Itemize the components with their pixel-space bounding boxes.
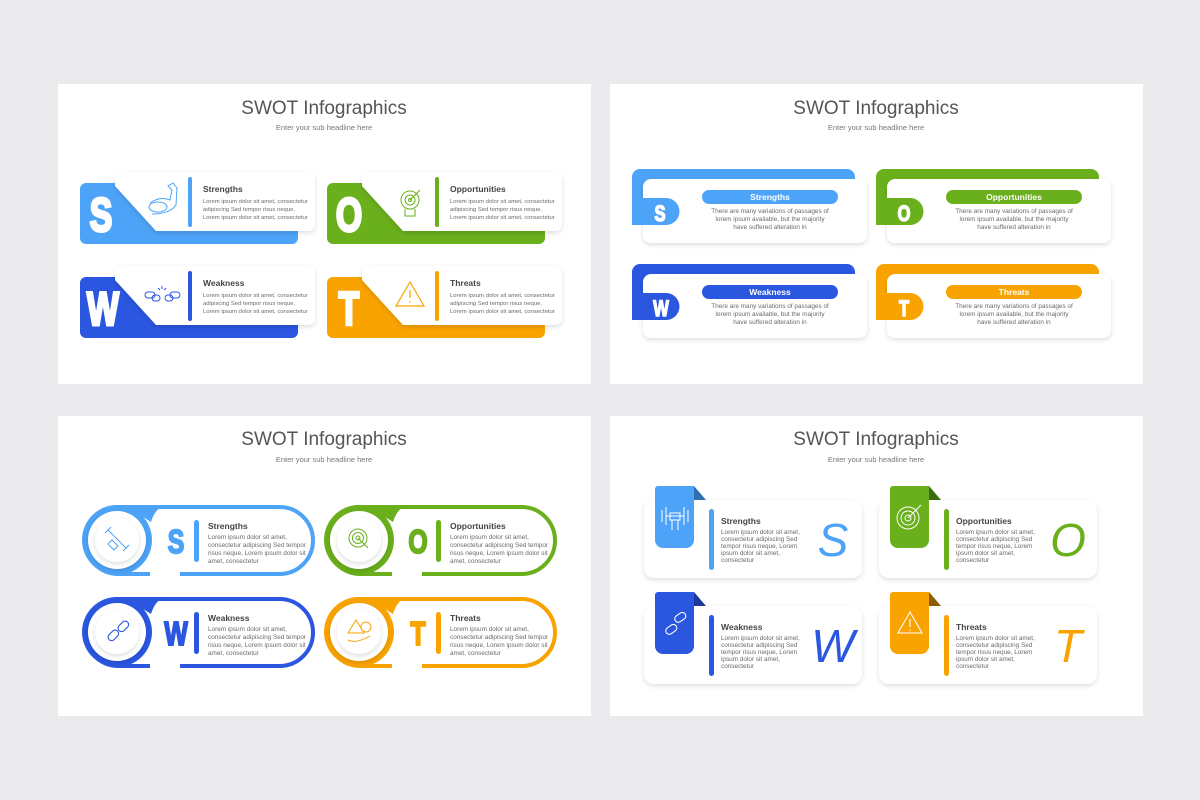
card: strengths — [644, 486, 862, 578]
card: threats: ipsum dolor sit amet, — [956, 656, 1015, 663]
card: strengths: Strengths — [208, 521, 248, 531]
card: threats: have suffered alteration in — [977, 319, 1051, 326]
card: weakness: lorem ipsum available, but the majority — [715, 311, 825, 318]
card: threats: consectetur adipiscing Sed — [956, 642, 1033, 649]
icon: target — [349, 529, 368, 548]
card: opportunities: Lorem ipsum dolor sit amet, consectetur — [450, 215, 555, 221]
card: opportunities: amet, consectetur — [450, 558, 502, 565]
card: threats: T — [410, 617, 426, 653]
card: strengths: Lorem ipsum dolor sit amet, — [721, 529, 800, 536]
icon: warning — [898, 612, 922, 633]
icon: muscle — [149, 183, 177, 214]
card: weakness: Weakness — [721, 622, 763, 632]
card: threats: Threats — [956, 622, 987, 632]
card: opportunities: have suffered alteration in — [977, 224, 1051, 231]
card: strengths: have suffered alteration in — [733, 224, 807, 231]
subtitle: Enter your sub headline here — [276, 123, 372, 132]
card: threats — [879, 592, 1097, 684]
card: strengths: consectetur adipiscing Sed tempor — [208, 542, 307, 549]
card: weakness: Lorem ipsum dolor sit amet, consectetur — [203, 293, 308, 299]
card: strengths: Strengths — [721, 516, 761, 526]
card: opportunities: ipsum dolor sit amet, — [956, 550, 1015, 557]
card: opportunities: Lorem ipsum dolor sit amet, — [956, 529, 1035, 536]
card: threats: Threats — [999, 287, 1030, 297]
slide 2: top-right — [610, 84, 1143, 384]
card: weakness: consectetur adipiscing Sed — [721, 642, 798, 649]
card: opportunities: There are many variations of passages of — [955, 208, 1073, 215]
icon: bulb target — [401, 190, 420, 216]
card: threats: risus neque, Lorem ipsum dolor sit — [450, 642, 548, 649]
card: strengths: S — [168, 525, 184, 561]
card: strengths: Lorem ipsum dolor sit amet, consectetur — [203, 215, 308, 221]
card: weakness: W — [811, 620, 859, 672]
card: weakness — [644, 592, 862, 684]
slide 3: bottom-left — [58, 416, 591, 716]
card: opportunities: risus neque, Lorem ipsum dolor sit — [450, 550, 548, 557]
card: weakness: Weakness — [749, 287, 791, 297]
card: threats: Lorem ipsum dolor sit amet, — [450, 626, 529, 633]
card: strengths: consectetur — [721, 557, 755, 564]
card: threats — [876, 264, 1111, 338]
card: strengths: Lorem ipsum dolor sit amet, consectetur — [203, 199, 308, 205]
card: threats: Threats — [450, 278, 481, 288]
icon: dumbbell — [662, 507, 688, 530]
card: weakness: Lorem ipsum dolor sit amet, — [721, 635, 800, 642]
card: strengths — [632, 169, 867, 243]
icon: chain — [145, 286, 180, 301]
card: opportunities — [327, 172, 562, 244]
card: opportunities: consectetur — [956, 557, 990, 564]
card: opportunities: O — [1050, 514, 1086, 566]
card: weakness: Lorem ipsum dolor sit amet, consectetur — [203, 309, 308, 315]
card: weakness: There are many variations of passages of — [711, 303, 829, 310]
card: opportunities: Opportunities — [986, 192, 1042, 202]
card: weakness: Weakness — [208, 613, 250, 623]
card: weakness: ipsum dolor sit amet, — [721, 656, 780, 663]
card: threats — [327, 266, 562, 338]
card: weakness: have suffered alteration in — [733, 319, 807, 326]
card: weakness — [82, 597, 313, 670]
card: strengths: S — [90, 189, 112, 241]
subtitle: Enter your sub headline here — [828, 123, 924, 132]
card: threats: consectetur — [956, 663, 990, 670]
card: threats: There are many variations of passages of — [955, 303, 1073, 310]
card: strengths: S — [818, 514, 849, 566]
card: opportunities: O — [408, 525, 428, 561]
card: opportunities — [324, 505, 555, 578]
card: strengths: risus neque, Lorem ipsum dolor sit — [208, 550, 306, 557]
card: threats: Lorem ipsum dolor sit amet, — [956, 635, 1035, 642]
card: weakness: Lorem ipsum dolor sit amet, — [208, 626, 287, 633]
icon: target — [897, 505, 921, 529]
card: opportunities: O — [336, 189, 362, 241]
slide 1: top-left — [58, 84, 591, 384]
card: opportunities: Lorem ipsum dolor sit amet, consectetur — [450, 199, 555, 205]
card: opportunities: Lorem ipsum dolor sit amet, — [450, 534, 529, 541]
card: opportunities: tempor risus neque, Lorem — [956, 543, 1032, 550]
card: opportunities: consectetur adipiscing Sed tempor — [450, 542, 549, 549]
card: threats: adipiscing Sed tempor risus neque, — [450, 301, 542, 307]
subtitle: Enter your sub headline here — [828, 455, 924, 464]
card: weakness — [632, 264, 867, 338]
card: opportunities: O — [898, 202, 910, 227]
card: strengths: amet, consectetur — [208, 558, 260, 565]
card: opportunities: lorem ipsum available, but the majority — [959, 216, 1069, 223]
card: weakness: consectetur adipiscing Sed tempor — [208, 634, 307, 641]
icon: hand warning — [348, 620, 371, 641]
card: weakness — [80, 266, 315, 338]
card: strengths — [80, 172, 315, 244]
card: strengths: Strengths — [203, 184, 243, 194]
icon: dumbbell hand — [105, 527, 129, 551]
card: opportunities — [879, 486, 1097, 578]
card: threats: Lorem ipsum dolor sit amet, consectetur — [450, 309, 555, 315]
card: threats: Lorem ipsum dolor sit amet, consectetur — [450, 293, 555, 299]
card: threats: T — [899, 297, 909, 322]
card: strengths: Strengths — [750, 192, 790, 202]
title: SWOT Infographics — [241, 98, 407, 119]
title: SWOT Infographics — [793, 429, 959, 450]
card: weakness: tempor risus neque, Lorem — [721, 649, 797, 656]
card: threats: tempor risus neque, Lorem — [956, 649, 1032, 656]
icon: broken chain — [107, 620, 130, 642]
card: weakness: W — [87, 283, 119, 335]
card: strengths: adipiscing Sed tempor risus neque, — [203, 207, 295, 213]
card: threats: amet, consectetur — [450, 650, 502, 657]
card: strengths: tempor risus neque, Lorem — [721, 543, 797, 550]
card: weakness: consectetur — [721, 663, 755, 670]
card: strengths: consectetur adipiscing Sed — [721, 536, 798, 543]
card: threats: Threats — [450, 613, 481, 623]
card: opportunities: adipiscing Sed tempor risus neque, — [450, 207, 542, 213]
card: weakness: W — [164, 617, 188, 653]
card: weakness: W — [653, 297, 669, 322]
card: opportunities — [876, 169, 1111, 243]
subtitle: Enter your sub headline here — [276, 455, 372, 464]
card: threats: lorem ipsum available, but the majority — [959, 311, 1069, 318]
title: SWOT Infographics — [241, 429, 407, 450]
card: strengths: lorem ipsum available, but the majority — [715, 216, 825, 223]
card: strengths: There are many variations of passages of — [711, 208, 829, 215]
card: opportunities: Opportunities — [450, 184, 506, 194]
card: strengths: S — [654, 202, 666, 227]
card: weakness: adipiscing Sed tempor risus neque, — [203, 301, 295, 307]
card: threats: T — [1054, 620, 1085, 672]
card: weakness: amet, consectetur — [208, 650, 260, 657]
card: threats: consectetur adipiscing Sed tempor — [450, 634, 549, 641]
card: weakness: Weakness — [203, 278, 245, 288]
card: strengths: ipsum dolor sit amet, — [721, 550, 780, 557]
card: opportunities: consectetur adipiscing Sed — [956, 536, 1033, 543]
title: SWOT Infographics — [793, 98, 959, 119]
card: strengths — [82, 505, 313, 578]
card: opportunities: Opportunities — [450, 521, 506, 531]
card: weakness: risus neque, Lorem ipsum dolor sit — [208, 642, 306, 649]
icon: warning — [396, 282, 424, 306]
card: threats: T — [339, 283, 359, 335]
card: opportunities: Opportunities — [956, 516, 1012, 526]
card: threats — [324, 597, 555, 670]
slide 4: bottom-right — [610, 416, 1143, 716]
icon: broken chain — [664, 611, 687, 636]
card: strengths: Lorem ipsum dolor sit amet, — [208, 534, 287, 541]
